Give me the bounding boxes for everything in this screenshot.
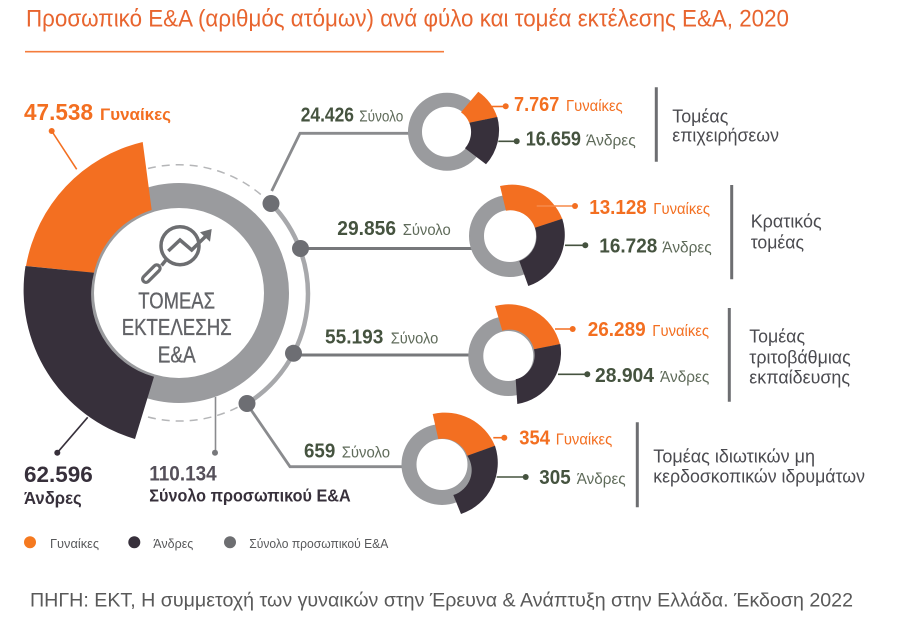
panel: business sector: Τομέας bbox=[672, 105, 728, 126]
legend: Γυναίκες bbox=[50, 536, 99, 551]
women total label: Γυναίκες bbox=[100, 106, 171, 124]
overall total label bbox=[149, 397, 351, 506]
panel: government sector: Άνδρες bbox=[662, 239, 712, 256]
panel: government sector: 29.856 bbox=[337, 218, 396, 240]
total ring bbox=[82, 196, 276, 390]
panel: higher education sector: εκπαίδευσης bbox=[749, 366, 850, 387]
women wedge bbox=[26, 142, 152, 273]
panel: business sector: Σύνολο bbox=[359, 109, 403, 126]
panel: higher education sector: Σύνολο bbox=[391, 330, 438, 347]
overall total label: 110.134 bbox=[149, 463, 217, 486]
legend bbox=[24, 536, 389, 551]
panel: private non-profit sector: Σύνολο bbox=[342, 445, 390, 462]
title: Προσωπικό Ε&Α (αριθμός ατόμων) ανά φύλο και τομέα εκτέλεσης Ε&Α, 2020 bbox=[26, 6, 789, 32]
legend: Σύνολο προσωπικού Ε&Α bbox=[249, 536, 389, 551]
centre label: ΤΟΜΕΑΣ bbox=[138, 287, 215, 313]
panel: private non-profit sector: 659 bbox=[304, 441, 335, 463]
panel: private non-profit sector bbox=[304, 413, 865, 514]
panel: business sector bbox=[301, 87, 779, 164]
centre label: Ε&Α bbox=[158, 341, 196, 367]
panel: government sector: 13.128 bbox=[589, 197, 647, 219]
panel: higher education sector bbox=[325, 304, 851, 404]
panel: higher education sector: 26.289 bbox=[588, 319, 646, 341]
panel: business sector: 7.767 bbox=[514, 94, 559, 116]
legend: Άνδρες bbox=[153, 536, 193, 551]
panel: private non-profit sector: κερδοσκοπικών ιδρυμάτων bbox=[653, 466, 865, 487]
panel: business sector: Γυναίκες bbox=[566, 98, 623, 115]
panel: higher education sector: 28.904 bbox=[595, 365, 655, 387]
centre label: ΕΚΤΕΛΕΣΗΣ bbox=[122, 314, 232, 340]
icon: magnifier with rising chart bbox=[146, 227, 212, 279]
source note: ΠΗΓΗ: ΕΚΤ, Η συμμετοχή των γυναικών στην Έρευνα & Ανάπτυξη στην Ελλάδα. Έκδοση 2022 bbox=[30, 590, 853, 612]
panel: higher education sector: 55.193 bbox=[325, 326, 383, 348]
panel: higher education sector: τριτοβάθμιας bbox=[749, 346, 851, 367]
connector lines and hub arc bbox=[148, 133, 474, 467]
panel: higher education sector: Άνδρες bbox=[660, 369, 710, 386]
donut: government sector bbox=[476, 185, 565, 286]
men total label: 62.596 bbox=[24, 462, 93, 487]
panel: government sector bbox=[337, 185, 822, 286]
women total label: 47.538 bbox=[24, 99, 93, 125]
centre label bbox=[122, 287, 232, 367]
panel: private non-profit sector: 305 bbox=[539, 467, 571, 489]
panel: business sector: 16.659 bbox=[526, 129, 581, 151]
panel: private non-profit sector: 354 bbox=[519, 427, 551, 449]
men total label: Άνδρες bbox=[24, 488, 82, 508]
women total label bbox=[24, 99, 171, 169]
panel: government sector: Σύνολο bbox=[403, 222, 451, 239]
donut: private non-profit sector bbox=[409, 413, 498, 514]
men wedge bbox=[24, 266, 154, 439]
donut: business sector bbox=[415, 92, 499, 164]
panel: business sector: Άνδρες bbox=[586, 133, 636, 150]
panel: private non-profit sector: Τομέας ιδιωτικών μη bbox=[653, 445, 815, 466]
hub dots bbox=[238, 195, 309, 412]
panel: business sector: 24.426 bbox=[301, 105, 354, 127]
panel: government sector: Κρατικός bbox=[751, 211, 822, 232]
panel: higher education sector: Τομέας bbox=[749, 325, 805, 346]
overall total label: Σύνολο προσωπικού Ε&Α bbox=[149, 486, 351, 506]
panel: government sector: τομέας bbox=[751, 231, 804, 252]
donut: higher education sector bbox=[476, 304, 561, 404]
panel: business sector: επιχειρήσεων bbox=[672, 125, 779, 146]
men total label bbox=[24, 417, 93, 508]
panel: private non-profit sector: Άνδρες bbox=[577, 471, 626, 488]
panel: government sector: Γυναίκες bbox=[653, 201, 710, 218]
main donut: total staff by gender bbox=[24, 142, 277, 439]
panel: higher education sector: Γυναίκες bbox=[652, 323, 709, 340]
panel: government sector: 16.728 bbox=[599, 235, 657, 257]
panel: private non-profit sector: Γυναίκες bbox=[556, 431, 613, 448]
